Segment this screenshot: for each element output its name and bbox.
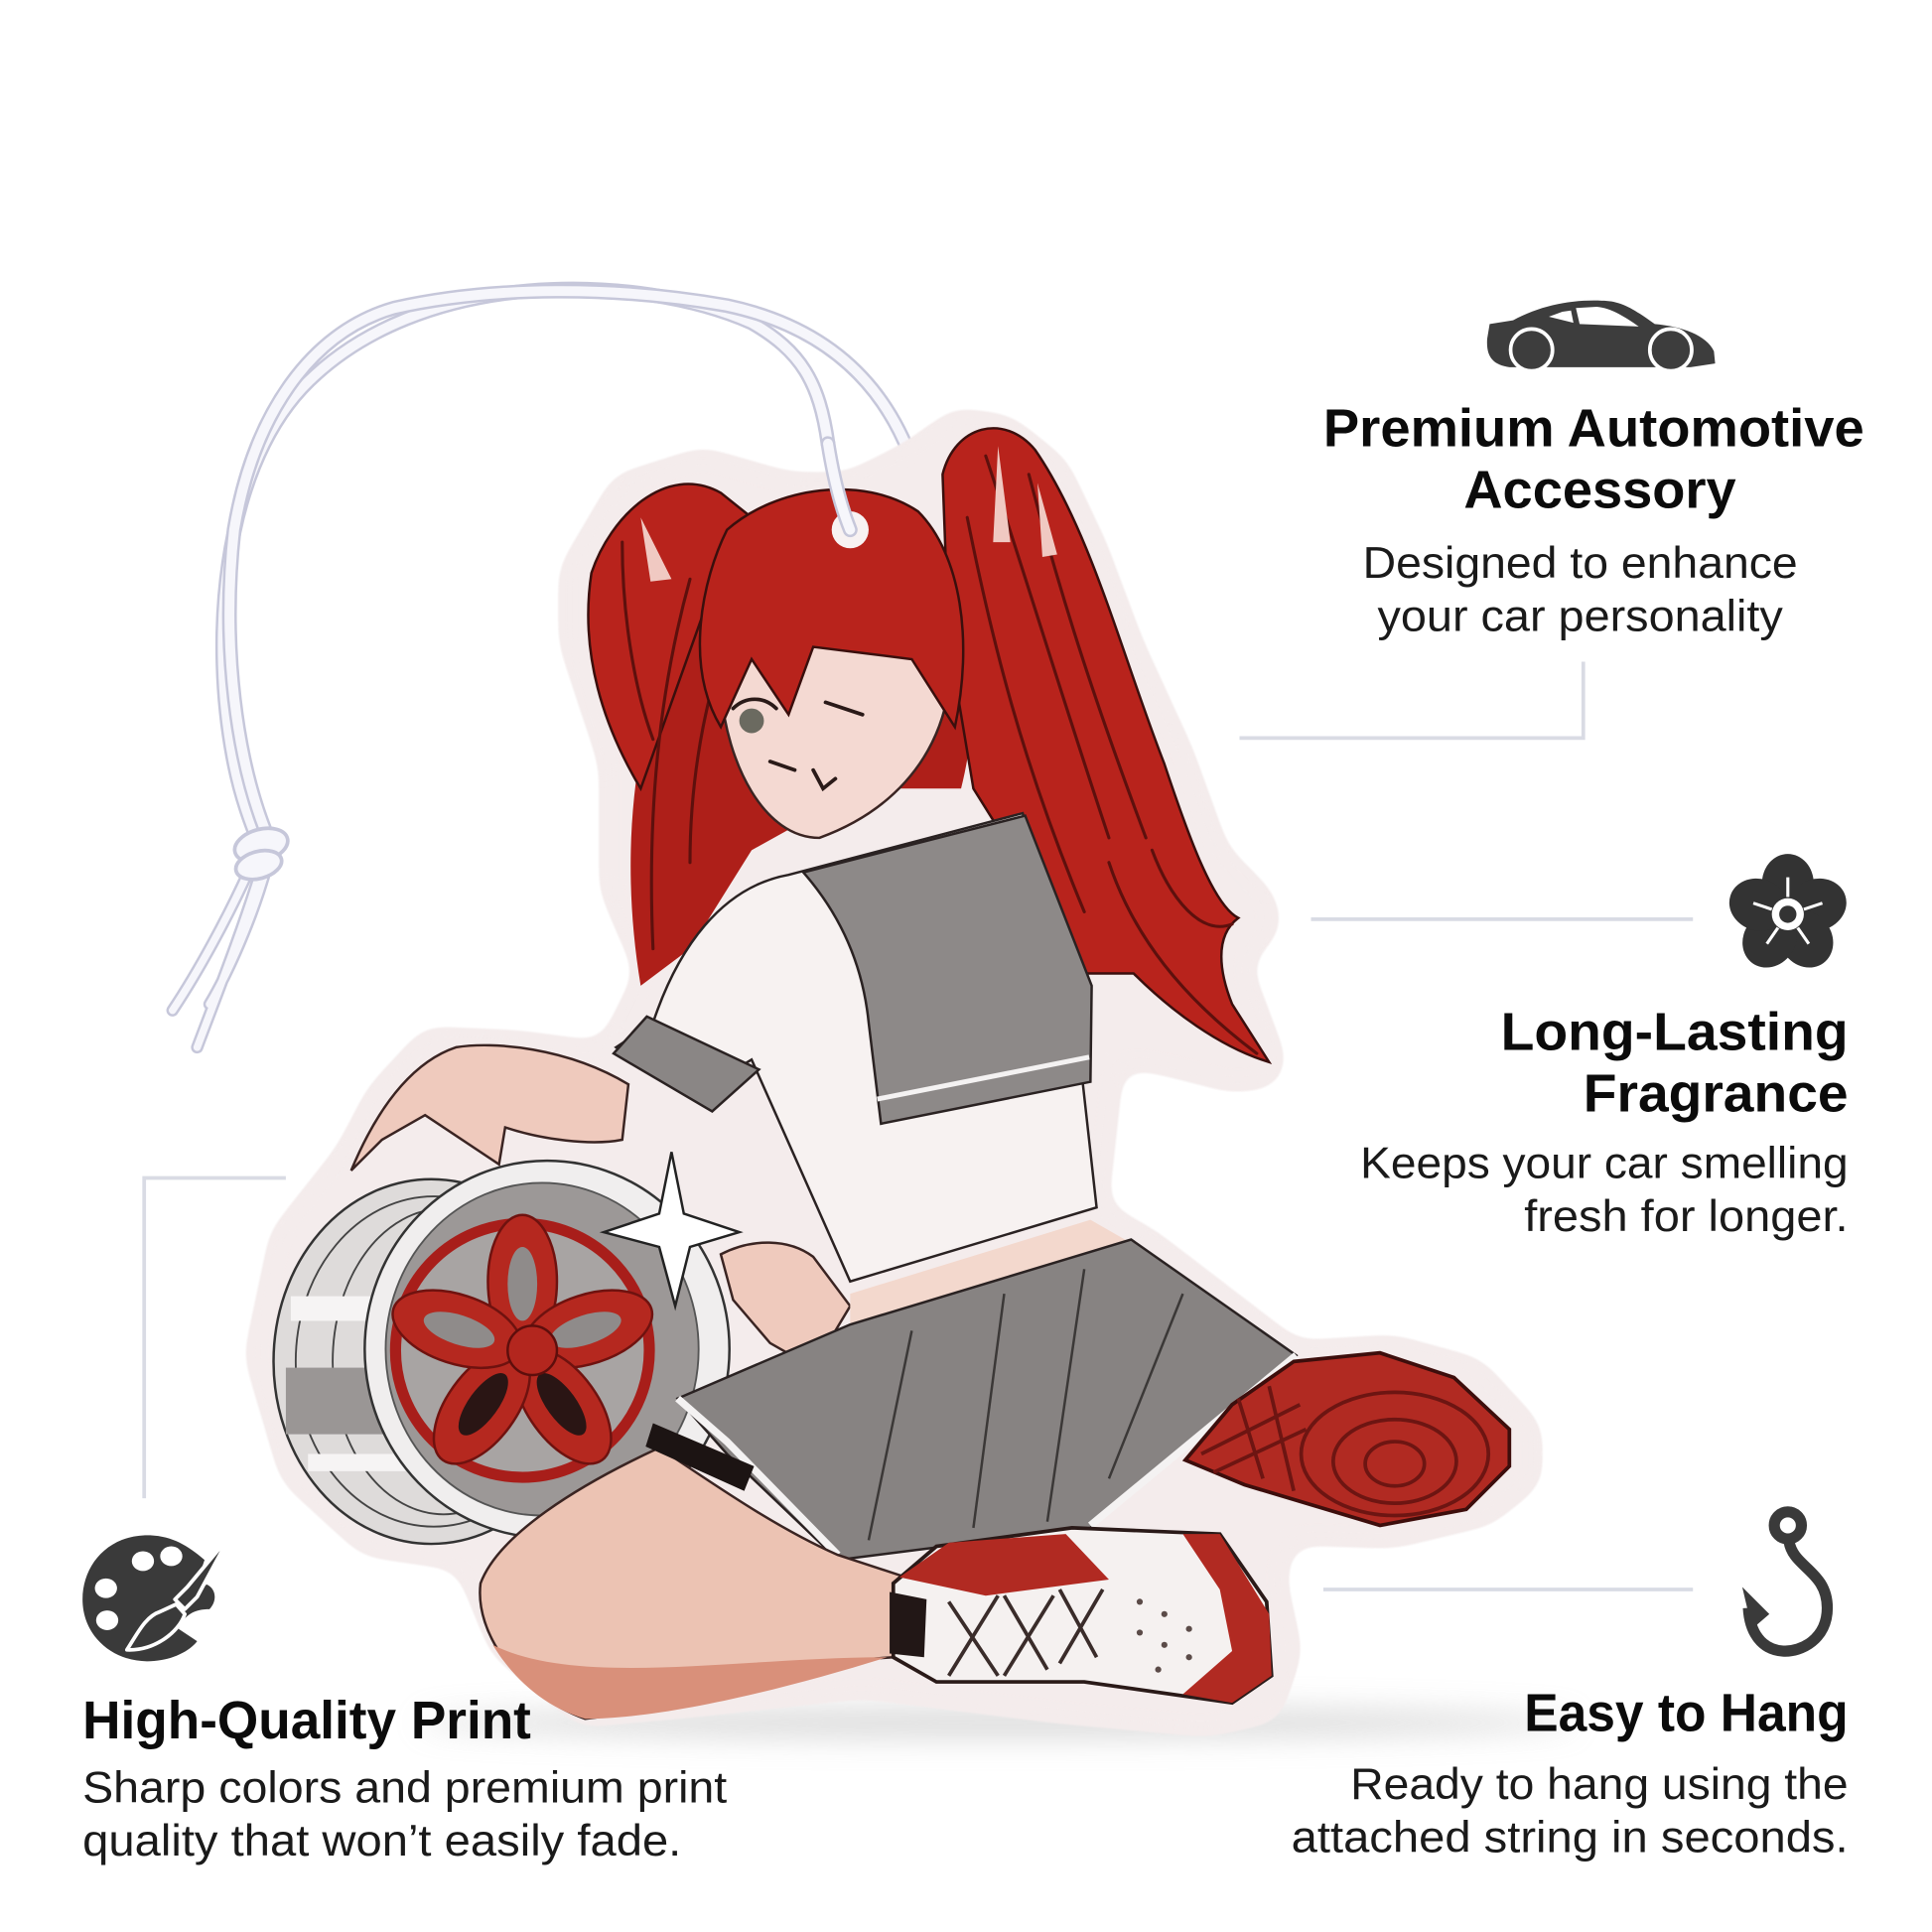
connector: print xyxy=(144,1177,286,1498)
waist band xyxy=(850,1220,1134,1324)
leg shading xyxy=(492,1645,888,1719)
heading: premium automotive accessory xyxy=(1323,399,1864,519)
string through hole xyxy=(828,444,869,548)
skirt xyxy=(678,1240,1297,1560)
hair strands xyxy=(622,456,1257,1053)
text: hang description: Ready to hang using the xyxy=(1350,1760,1849,1809)
connector: fragrance xyxy=(1311,917,1693,920)
iris xyxy=(740,709,763,733)
text: accessory description: your car personality xyxy=(1378,592,1783,640)
icon: palette and brush xyxy=(82,1535,230,1661)
arm reaching to wheel xyxy=(351,1045,628,1171)
text: accessory description xyxy=(1363,539,1798,640)
text: hang description xyxy=(1292,1760,1849,1862)
drop shadow under product xyxy=(419,1707,1578,1738)
icon: hook xyxy=(1742,1512,1828,1651)
icon: car xyxy=(1487,301,1716,371)
heading: premium automotive accessory: Premium Automotive xyxy=(1323,399,1864,458)
sneaker sole: red tread xyxy=(1185,1353,1509,1525)
text: print description: Sharp colors and premium print xyxy=(82,1764,727,1813)
wheel barrel xyxy=(274,1179,589,1544)
heading: easy to hang: Easy to Hang xyxy=(1524,1685,1849,1743)
sleeve trim xyxy=(614,1017,759,1111)
wheel xyxy=(274,1152,740,1544)
die-cut card backing xyxy=(261,425,1525,1721)
fringe xyxy=(700,489,963,727)
face xyxy=(721,617,949,838)
seated leg xyxy=(480,1448,905,1719)
text: fragrance description: Keeps your car smelling xyxy=(1360,1139,1849,1187)
thigh band xyxy=(645,1423,755,1491)
connector: accessory xyxy=(1240,661,1584,738)
sparkle xyxy=(604,1152,740,1307)
text: fragrance description: fresh for longer. xyxy=(1524,1192,1849,1241)
right pigtail xyxy=(942,428,1269,1062)
wheel face xyxy=(364,1161,730,1538)
heading: high-quality print: High-Quality Print xyxy=(82,1692,531,1750)
eye, nose and mouth xyxy=(733,699,863,788)
text: print description xyxy=(82,1764,727,1865)
text: hang description: attached string in seconds. xyxy=(1292,1813,1849,1862)
heading: long-lasting fragrance xyxy=(1501,1003,1849,1123)
front sneaker xyxy=(890,1528,1272,1703)
left pigtail xyxy=(588,484,752,788)
heading: long-lasting fragrance: Long-Lasting xyxy=(1501,1003,1849,1061)
hanging string xyxy=(173,289,909,1047)
shirt xyxy=(617,813,1097,1282)
sailor collar xyxy=(803,816,1092,1124)
hair highlights xyxy=(640,446,1057,582)
red sakura rim xyxy=(383,1215,662,1480)
product: die-cut air freshener xyxy=(173,289,1525,1721)
heading: premium automotive accessory: Accessory xyxy=(1463,461,1736,519)
icon: sakura flower xyxy=(1723,854,1854,978)
text: print description: quality that won’t easily fade. xyxy=(82,1817,681,1865)
connector: hang xyxy=(1323,1587,1693,1590)
text: accessory description: Designed to enhance xyxy=(1363,539,1798,588)
heading: long-lasting fragrance: Fragrance xyxy=(1584,1064,1849,1123)
back hair xyxy=(630,490,973,986)
text: fragrance description xyxy=(1360,1139,1849,1241)
hand on wheel xyxy=(721,1243,850,1368)
